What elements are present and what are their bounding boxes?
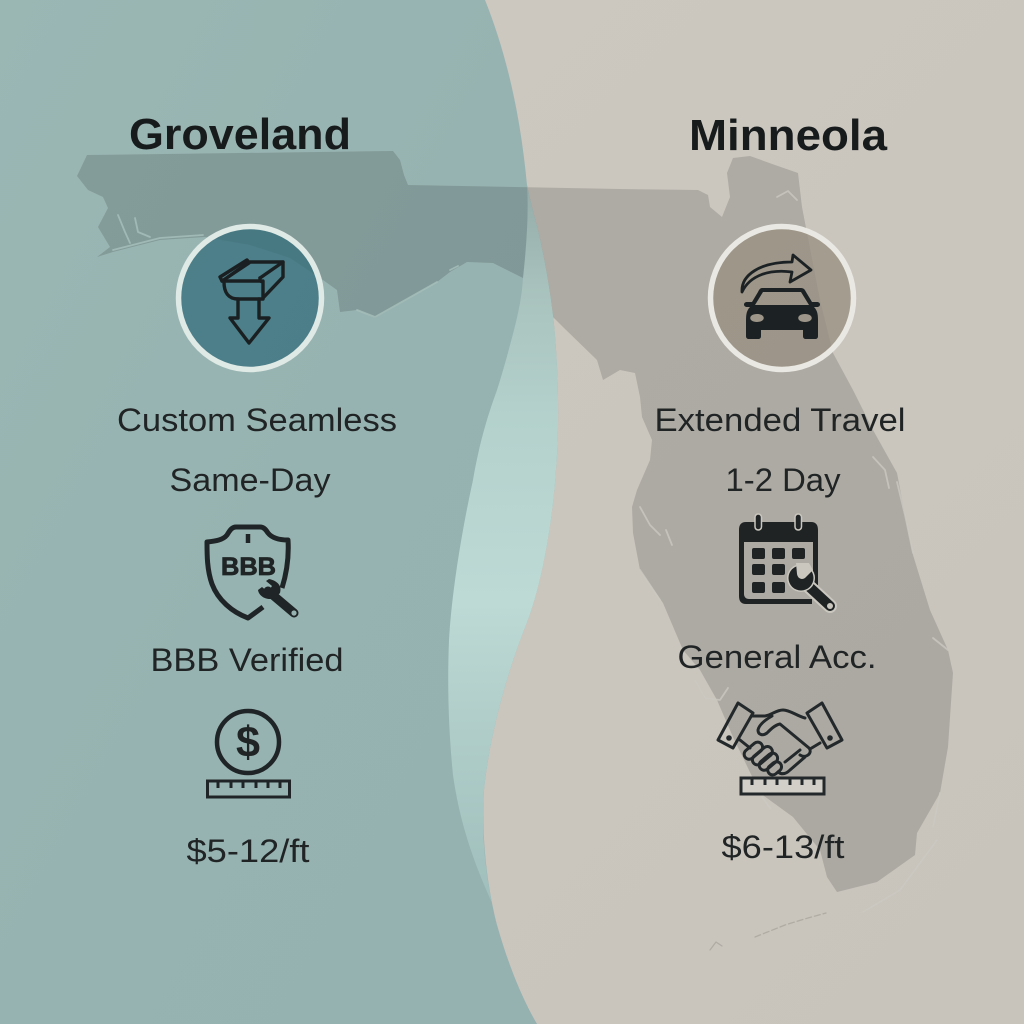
label: $6-13/ft: $6-13/ft xyxy=(722,829,845,865)
icon: BBB shield with wrench: BBB xyxy=(221,553,276,581)
icon: dollar coin with ruler: $ xyxy=(236,718,260,767)
icon: car with arrow in circle xyxy=(710,226,854,370)
icon: gutter with down arrow in circle xyxy=(178,226,322,370)
label: General Acc.: General Acc. xyxy=(678,639,876,675)
title: Minneola: Minneola xyxy=(689,111,888,160)
label: Custom Seamless: Custom Seamless xyxy=(117,402,397,438)
label: BBB Verified: BBB Verified xyxy=(150,642,344,678)
overlap light band xyxy=(448,185,558,903)
label: Same-Day: Same-Day xyxy=(170,462,330,498)
title: Groveland: Groveland xyxy=(129,110,351,159)
label: $5-12/ft: $5-12/ft xyxy=(186,833,310,869)
label: 1-2 Day: 1-2 Day xyxy=(726,462,840,498)
background: left teal panel xyxy=(0,0,558,1024)
Florida map silhouette xyxy=(77,151,953,950)
icon: BBB shield with wrench xyxy=(207,527,297,618)
icon: dollar coin with ruler xyxy=(208,711,290,797)
icon: handshake with ruler xyxy=(718,703,842,794)
label: Extended Travel: Extended Travel xyxy=(654,402,906,438)
icon: calendar with wrench xyxy=(739,514,833,609)
